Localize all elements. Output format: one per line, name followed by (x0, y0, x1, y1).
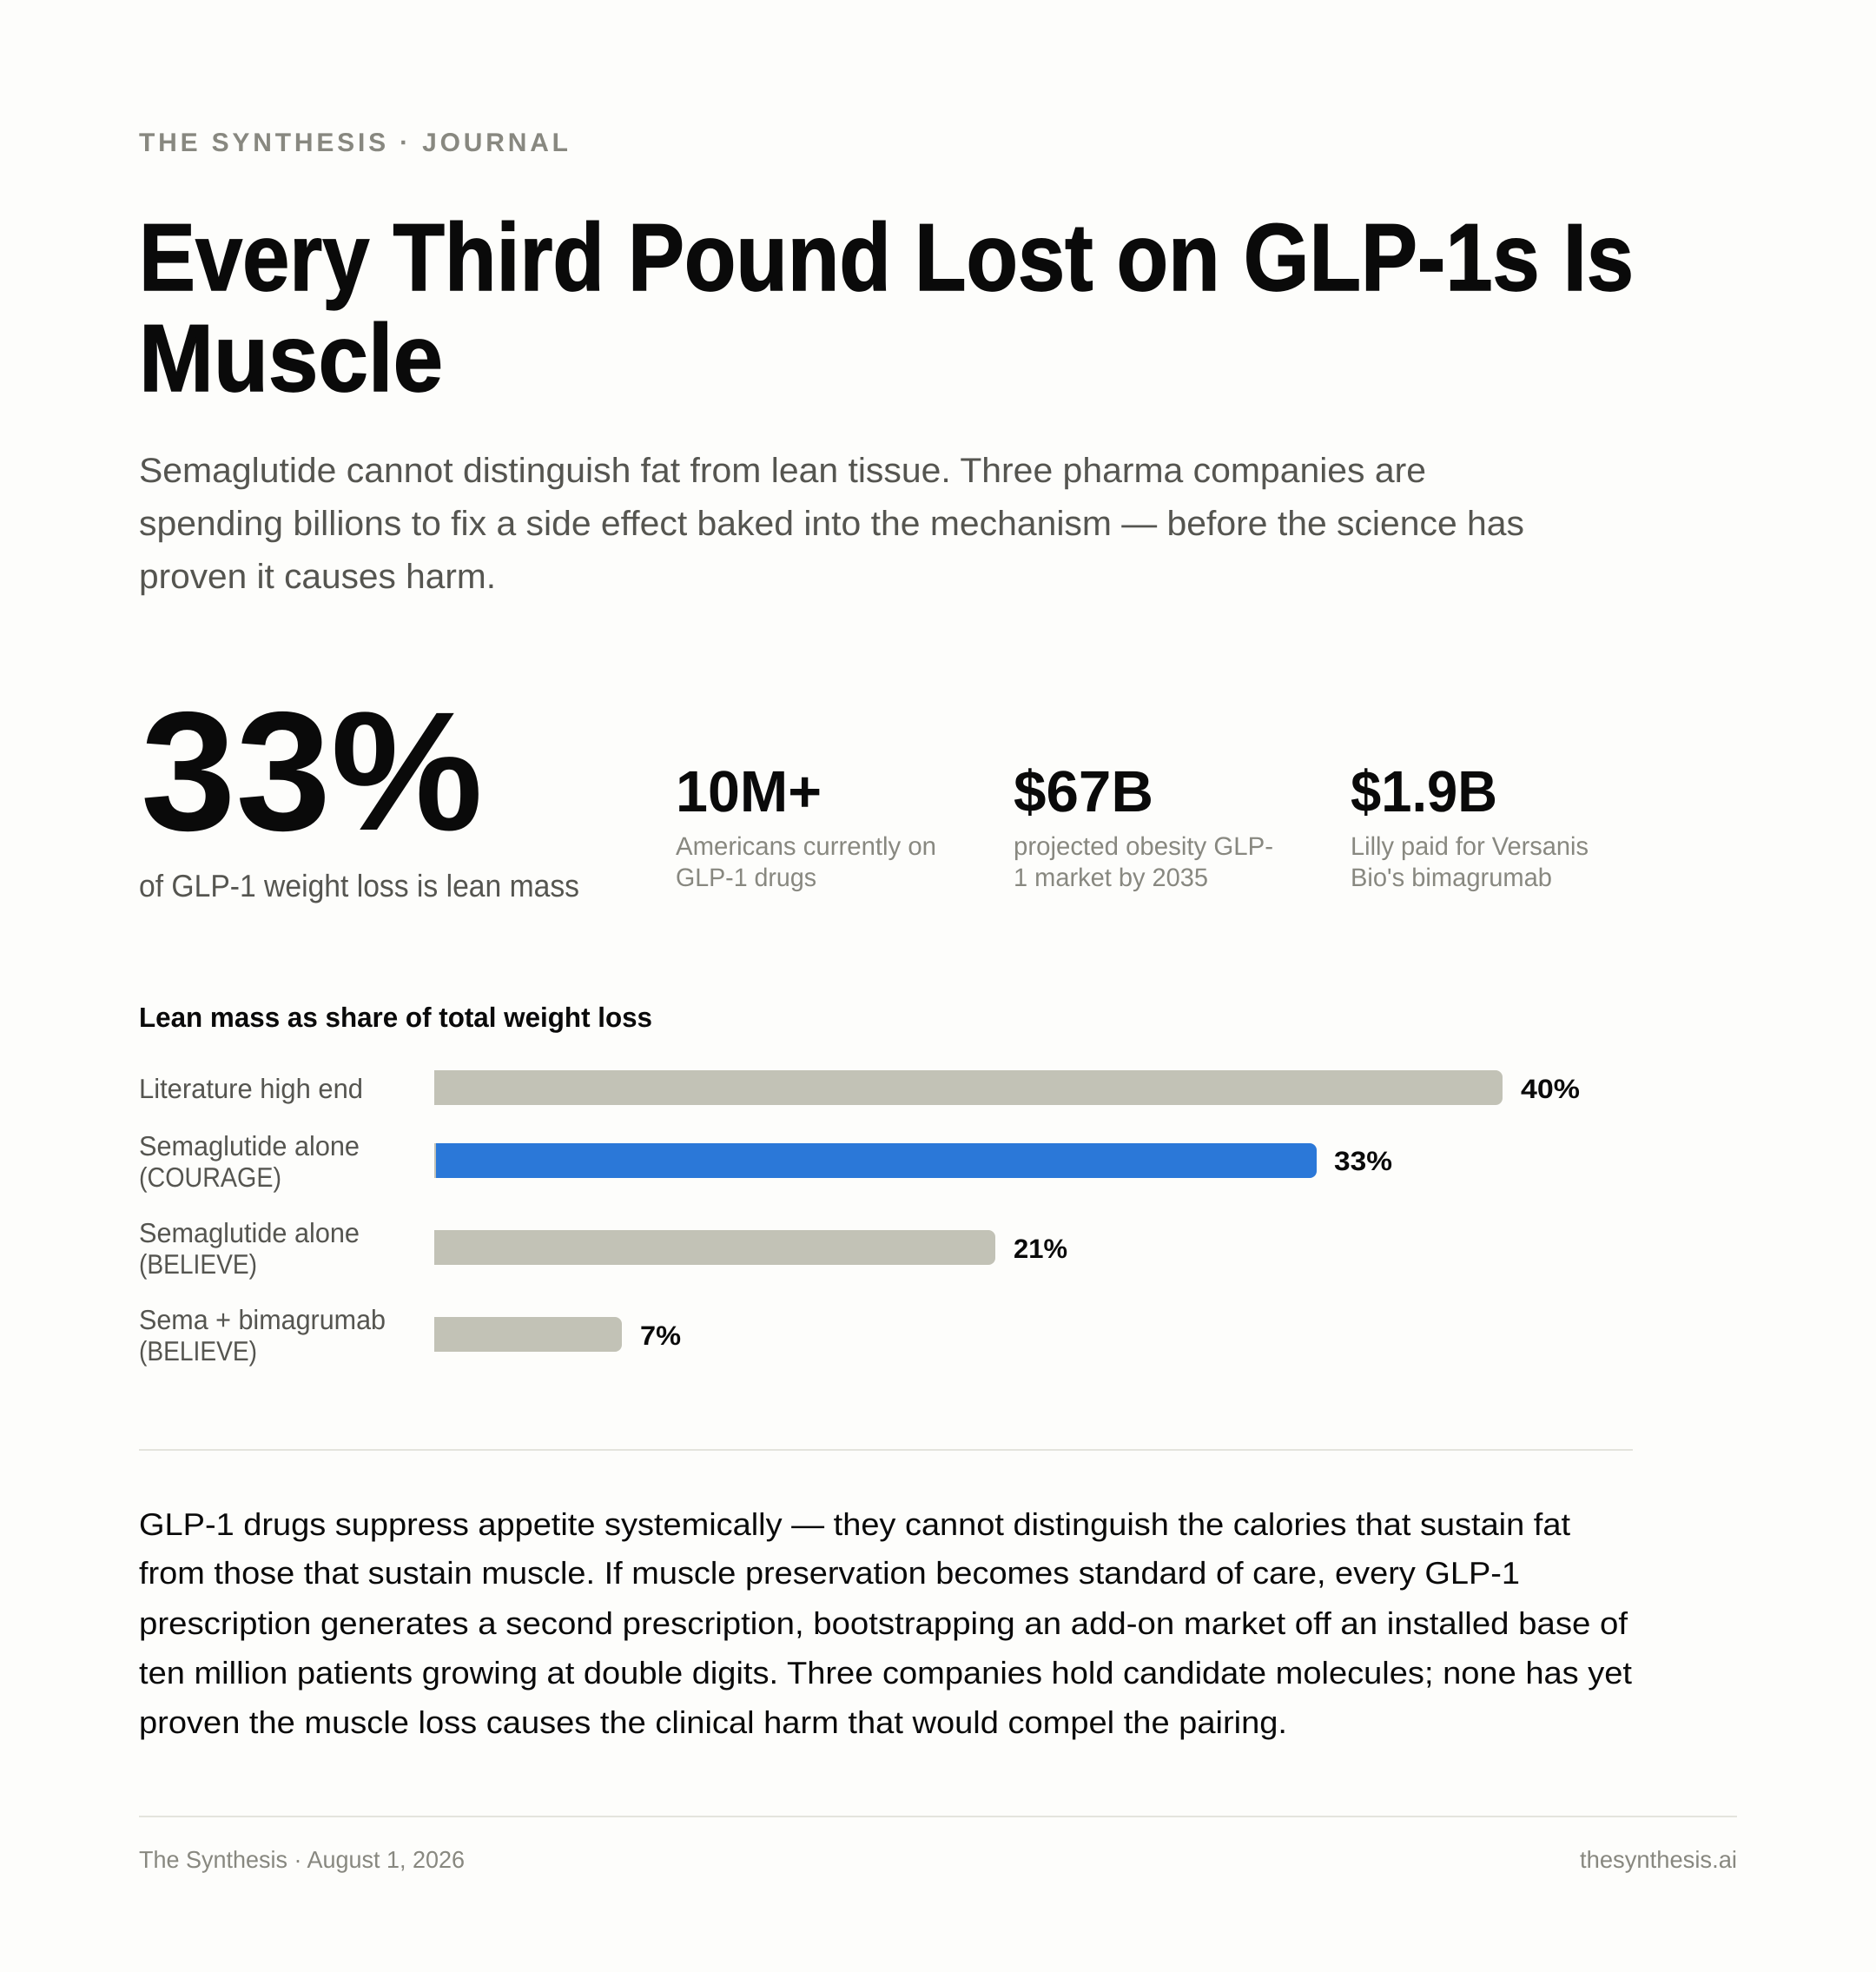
stat: $67B: $67B (1014, 759, 1153, 824)
row: semaglutide alone BELIEVE (139, 1217, 1067, 1280)
row: literature high end (139, 1070, 1580, 1105)
body paragraph: from those that sustain muscle. If muscle preservation becomes standard of care, every GLP-1 (139, 1555, 1520, 1591)
row: semaglutide alone COURAGE: (COURAGE) (139, 1161, 281, 1193)
hero number: 33% (141, 677, 483, 866)
body paragraph: GLP-1 drugs suppress appetite systemically — they cannot distinguish the calories that sustain fat (139, 1506, 1570, 1542)
row: semaglutide alone COURAGE: Semaglutide alone (139, 1130, 360, 1161)
row: sema + bimagrumab BELIEVE: (BELIEVE) (139, 1335, 257, 1367)
stat: $67B (1014, 759, 1273, 892)
row: literature high end: 40% (1521, 1074, 1580, 1104)
kicker: THE SYNTHESIS · JOURNAL (139, 129, 568, 157)
footer: The Synthesis · August 1, 2026 (139, 1846, 465, 1873)
row: sema + bimagrumab BELIEVE (139, 1304, 681, 1367)
stat: $67B: projected obesity GLP- (1014, 832, 1273, 861)
bar chart (139, 1070, 1580, 1367)
stat: 10M+: 10M+ (676, 759, 822, 824)
body paragraph: prescription generates a second prescription, bootstrapping an add-on market off an installed base of (139, 1605, 1628, 1641)
hero caption: of GLP-1 weight loss is lean mass (139, 868, 579, 903)
stat: 10M+: Americans currently on (676, 832, 936, 861)
title: Muscle (139, 305, 443, 412)
row: semaglutide alone COURAGE: 33% (1334, 1146, 1392, 1176)
stat: $1.9B (1351, 759, 1589, 892)
body paragraph: ten million patients growing at double digits. Three companies hold candidate molecules; none has yet (139, 1655, 1632, 1691)
row: semaglutide alone BELIEVE: 21% (1014, 1234, 1067, 1264)
body paragraph: proven the muscle loss causes the clinical harm that would compel the pairing. (139, 1704, 1287, 1740)
row: semaglutide alone BELIEVE: Semaglutide alone (139, 1217, 360, 1248)
chart heading: Lean mass as share of total weight loss (139, 1002, 652, 1033)
stat: $1.9B: Bio's bimagrumab (1351, 864, 1552, 892)
stat: $1.9B: Lilly paid for Versanis (1351, 832, 1589, 861)
subtitle (139, 452, 1524, 596)
row: semaglutide alone BELIEVE: (BELIEVE) (139, 1248, 257, 1280)
subtitle: proven it causes harm. (139, 558, 496, 596)
row: literature high end: Literature high end (139, 1073, 363, 1104)
subtitle: Semaglutide cannot distinguish fat from lean tissue. Three pharma companies are (139, 452, 1426, 490)
footer (139, 1846, 1737, 1873)
subtitle: spending billions to fix a side effect baked into the mechanism — before the science has (139, 505, 1524, 543)
row: sema + bimagrumab BELIEVE: 7% (640, 1320, 681, 1351)
body paragraph (139, 1506, 1632, 1740)
stat: 10M+ (676, 759, 936, 892)
row: semaglutide alone COURAGE (139, 1130, 1392, 1193)
row: sema + bimagrumab BELIEVE: Sema + bimagrumab (139, 1304, 386, 1335)
stat: $1.9B: $1.9B (1351, 759, 1497, 824)
footer: thesynthesis.ai (1580, 1846, 1737, 1873)
hero stat: 33% (139, 677, 579, 903)
stat: 10M+: GLP-1 drugs (676, 864, 816, 892)
stat: $67B: 1 market by 2035 (1014, 864, 1208, 892)
title (139, 204, 1634, 412)
title: Every Third Pound Lost on GLP-1s Is (139, 204, 1634, 311)
